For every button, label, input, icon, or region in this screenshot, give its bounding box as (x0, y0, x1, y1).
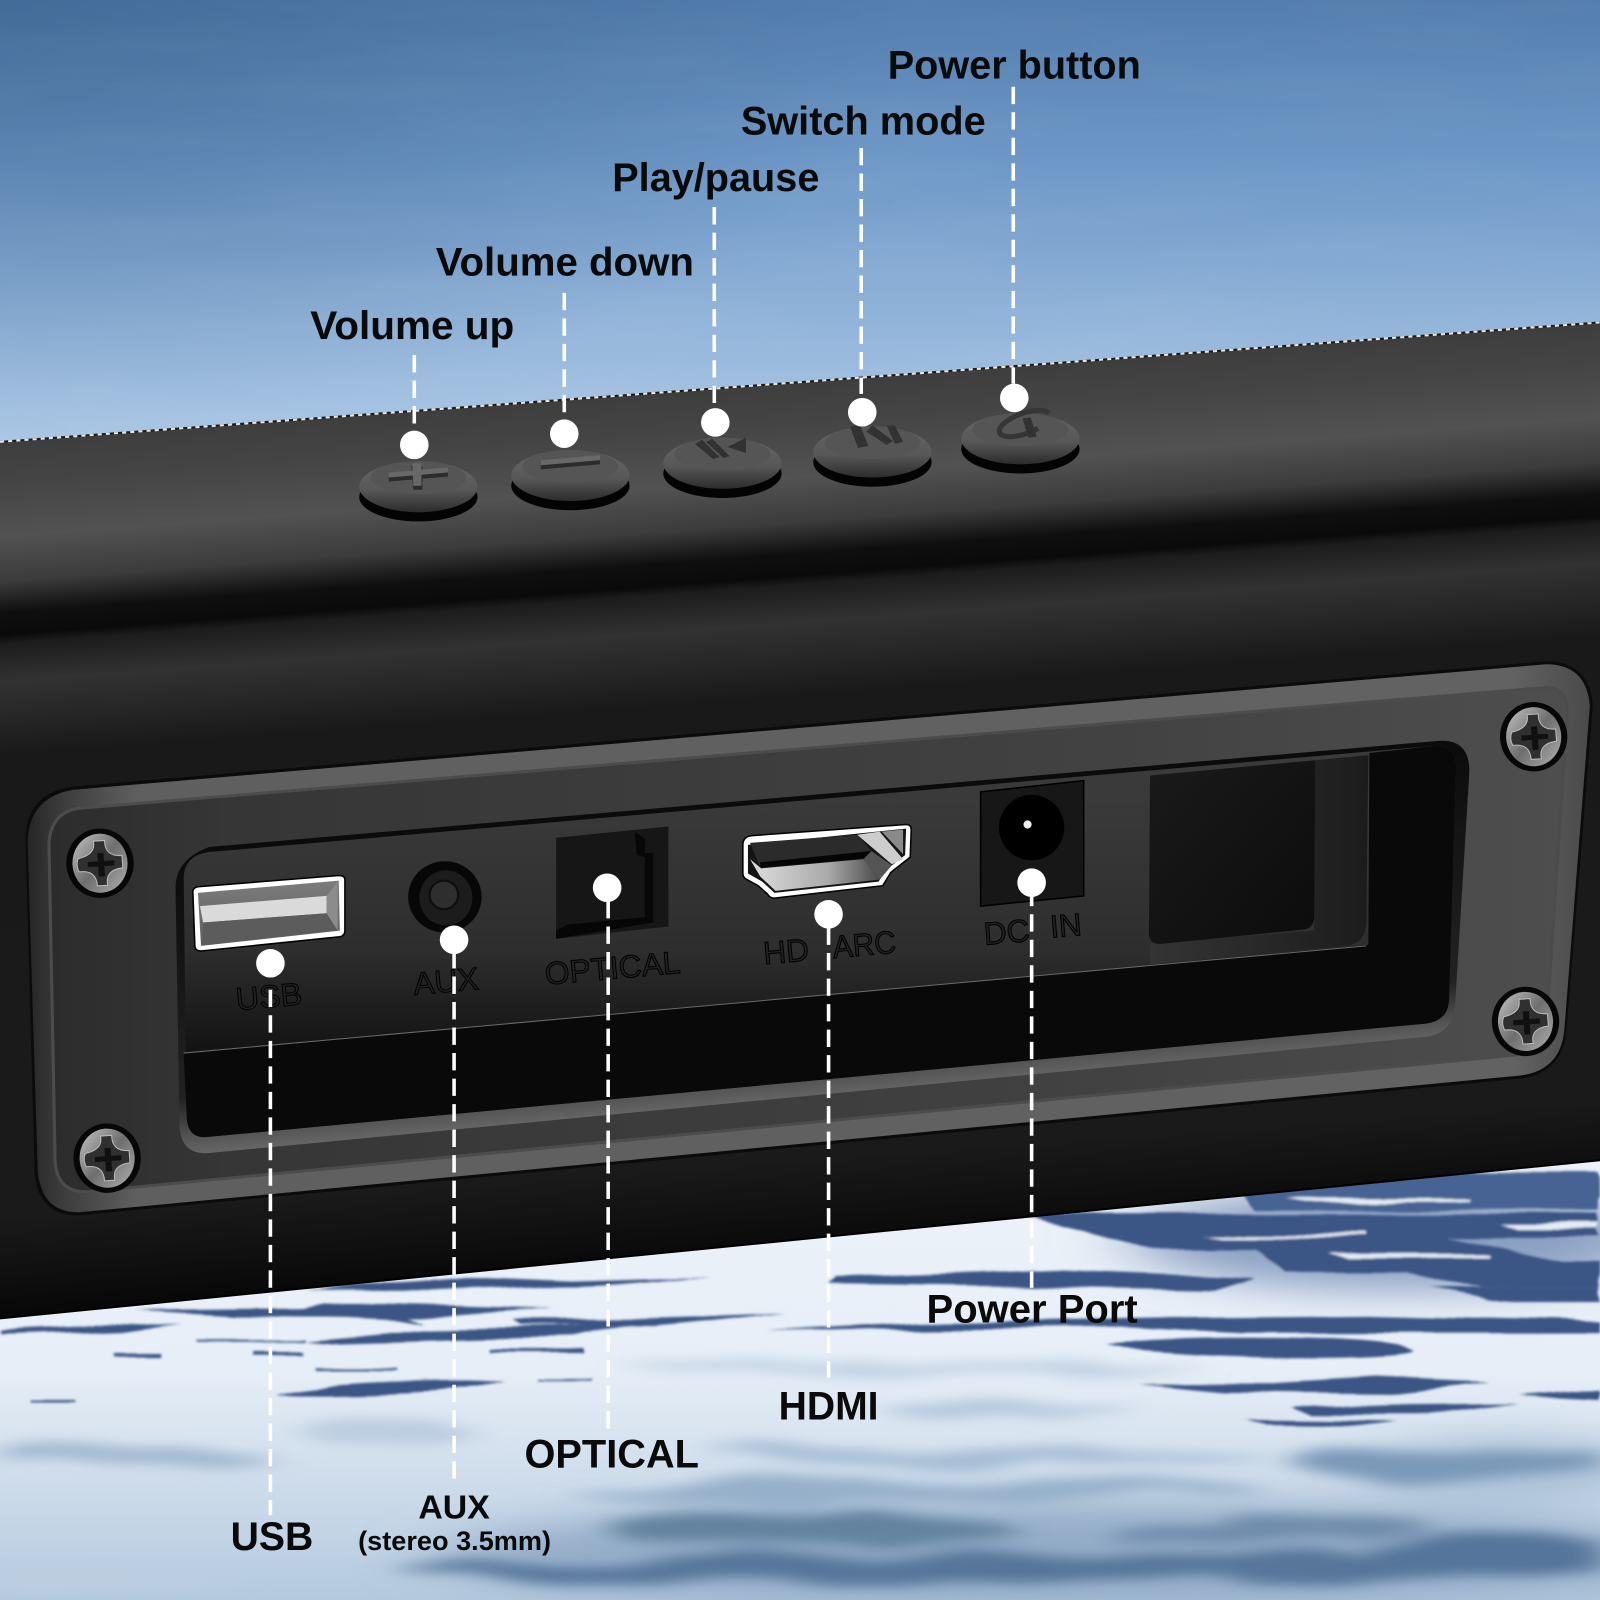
callout: USB: USB (231, 1515, 313, 1559)
button: switch mode (813, 426, 932, 487)
callout: volume up (310, 304, 514, 459)
background: water surface (0, 1143, 1600, 1600)
button: play/pause (663, 438, 782, 498)
callout: USB (231, 949, 313, 1559)
callout: play/pause: Play/pause (612, 156, 819, 200)
callout: AUX: (stereo 3.5mm) (358, 1526, 551, 1556)
speaker body (0, 322, 1600, 1318)
callout: volume down: Volume down (436, 241, 694, 285)
embossed port labels: IN (1048, 906, 1083, 945)
button: volume down (511, 450, 630, 510)
screw: bottom left (71, 1121, 143, 1195)
embossed port labels: OPTICAL (543, 944, 682, 992)
callout: volume down (436, 241, 694, 448)
embossed port labels: HD (762, 931, 810, 971)
callout: power button: Power button (888, 44, 1141, 88)
callout: HDMI (779, 900, 879, 1428)
screw: bottom right (1489, 984, 1562, 1058)
port: OPTICAL (556, 827, 668, 939)
button: volume up (359, 461, 478, 521)
callout: power port (927, 868, 1138, 1331)
panel: ports plate (26, 661, 1593, 1215)
callout: play/pause (612, 156, 819, 437)
embossed port labels: USB (234, 976, 303, 1017)
screw: top left (64, 826, 136, 900)
embossed port labels: AUX (412, 960, 480, 1002)
port: HDMI (743, 824, 911, 898)
callout: OPTICAL: OPTICAL (524, 1432, 699, 1476)
port: AUX (408, 861, 482, 933)
dark compartment (1149, 760, 1315, 944)
callout: volume up: Volume up (310, 304, 514, 348)
screw: top right (1498, 700, 1570, 774)
callout: HDMI: HDMI (779, 1384, 879, 1428)
embossed port labels: ARC (831, 924, 897, 965)
button: power (961, 405, 1080, 473)
embossed port labels: DC (982, 912, 1031, 952)
port: DC IN (981, 781, 1084, 906)
callout: switch mode: Switch mode (741, 100, 986, 144)
port: USB (193, 876, 345, 951)
background: sky (0, 0, 1600, 490)
recess bevel (176, 741, 1469, 1153)
recess interior (184, 746, 1456, 1137)
callout: power port: Power Port (927, 1287, 1138, 1331)
callout: switch mode (741, 100, 986, 427)
callout: AUX: AUX (418, 1489, 490, 1526)
callout: OPTICAL (524, 873, 699, 1476)
callout: power button (888, 44, 1141, 412)
callout: AUX (358, 926, 551, 1556)
embossed port labels (234, 906, 1083, 1017)
